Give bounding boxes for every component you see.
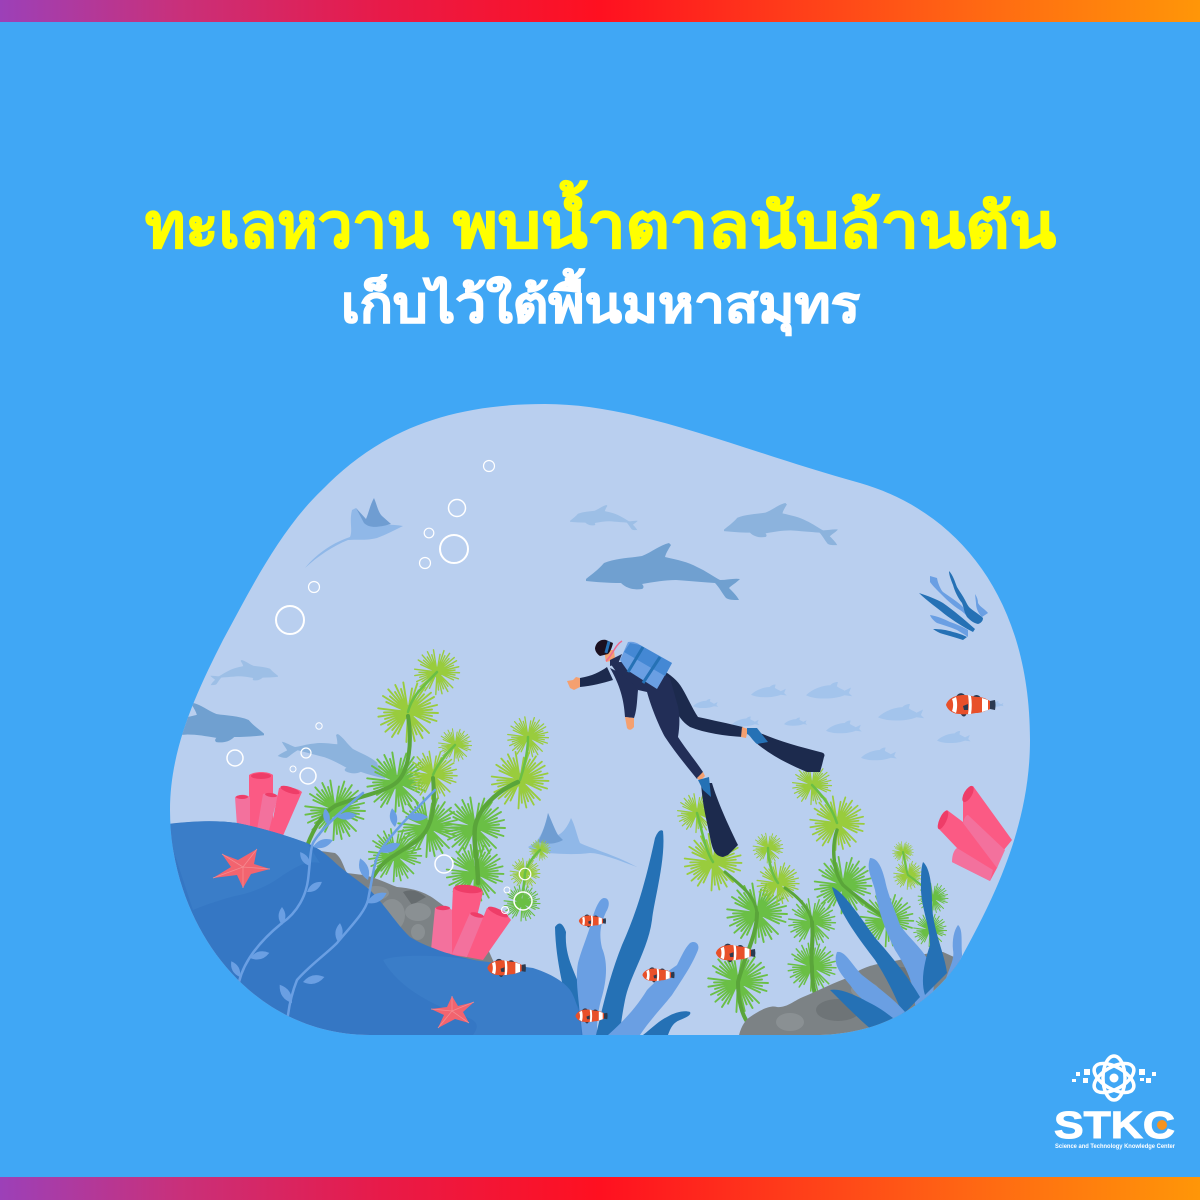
clownfish xyxy=(487,693,996,1023)
plant tufts xyxy=(305,780,365,840)
forward hand xyxy=(567,677,580,690)
logo pixel squares xyxy=(1072,1069,1156,1083)
lower arm xyxy=(610,668,638,718)
seaweed right group xyxy=(830,858,963,1030)
vine leaves xyxy=(228,808,428,1005)
manta ray top xyxy=(305,498,403,568)
air tank xyxy=(620,642,672,689)
plant tufts right xyxy=(793,766,832,804)
plant stems right xyxy=(697,785,933,1023)
logo tagline: Science and Technology Knowledge Center xyxy=(1055,1144,1176,1150)
starfish right xyxy=(431,996,474,1028)
logo atom icon xyxy=(1089,1056,1139,1100)
head xyxy=(595,640,622,666)
vines on mound xyxy=(239,790,435,1015)
diver xyxy=(567,640,824,857)
bottom gradient bar xyxy=(0,1177,1200,1200)
seaweed top right xyxy=(919,571,988,640)
starfish left xyxy=(213,849,270,888)
bubbles xyxy=(227,460,494,784)
manta ray lower xyxy=(528,813,637,867)
bubbles over plants xyxy=(435,855,532,914)
arm reaching forward xyxy=(580,667,613,687)
seaweed left group xyxy=(555,830,698,1035)
title line 2: เก็บไว้ใต้พื้นมหาสมุทร xyxy=(341,268,860,336)
coral group center xyxy=(431,884,511,960)
underwater scene xyxy=(133,400,1040,1040)
lower hand xyxy=(625,717,634,730)
dolphin small top xyxy=(570,505,638,530)
plants left cluster xyxy=(305,650,550,921)
dolphin large xyxy=(586,543,740,600)
top gradient bar xyxy=(0,0,1200,22)
logo wordmark: STKC xyxy=(1054,1105,1175,1147)
rocks left xyxy=(313,850,495,965)
dolphin behind plants xyxy=(278,734,385,778)
far leg and fin xyxy=(662,670,824,772)
dolphin big left xyxy=(182,703,264,742)
coral group left xyxy=(235,772,302,838)
logo orange dot xyxy=(1157,1120,1167,1130)
dolphin small left xyxy=(210,660,278,685)
plant stems xyxy=(307,672,540,905)
body and near leg xyxy=(610,660,738,857)
school of small fish xyxy=(693,682,1004,760)
STKC logo xyxy=(1054,1056,1176,1150)
mound xyxy=(160,790,583,1040)
coral group right xyxy=(936,784,1012,881)
rocks right xyxy=(738,952,965,1040)
water blob xyxy=(160,400,1040,1040)
title line 1 xyxy=(145,180,1056,261)
plants right cluster xyxy=(678,766,948,1023)
title line 1: พบน้ำตาลนับล้านตัน xyxy=(453,180,1056,261)
dolphin medium top right xyxy=(724,503,838,545)
title line 1: ทะเลหวาน xyxy=(145,192,429,261)
